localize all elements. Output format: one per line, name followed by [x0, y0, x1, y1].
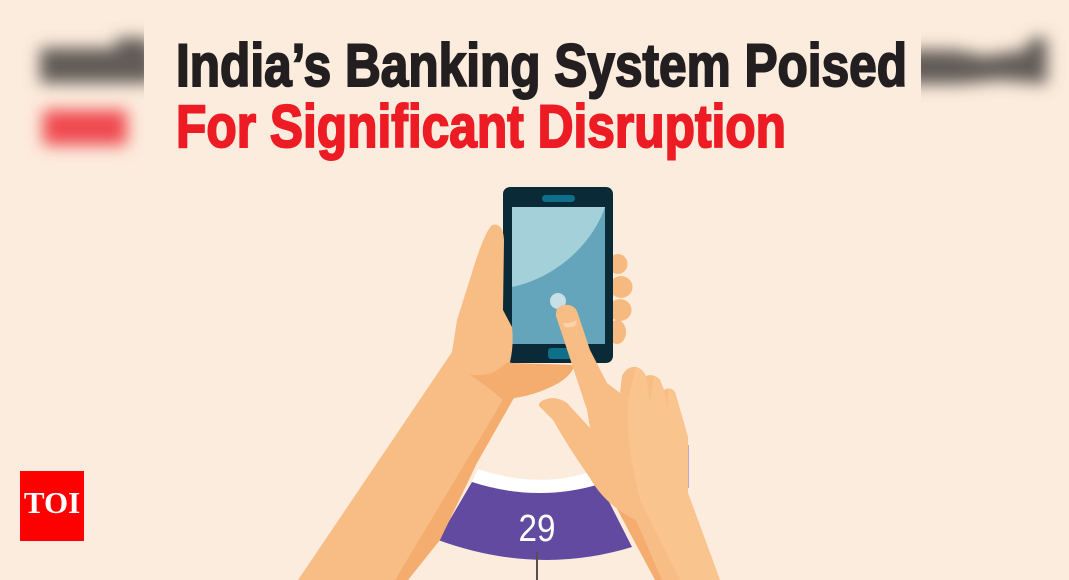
arm shadow strip — [390, 395, 515, 580]
logo: TOI — [20, 471, 84, 541]
dial sliver behind hand — [680, 445, 688, 488]
dial number: 29 — [518, 508, 556, 550]
phone speaker — [542, 195, 575, 202]
title line 2: For Significant Disruption — [176, 93, 786, 160]
phone screen highlight — [512, 207, 605, 287]
right hand — [539, 305, 720, 580]
icon: left hand and arm — [298, 225, 575, 580]
icon: fingers behind phone — [608, 254, 632, 344]
phone home button — [548, 348, 574, 359]
logo red square — [20, 471, 84, 541]
dial purple arc — [438, 482, 632, 560]
left arm and hand — [298, 225, 513, 580]
phone body — [503, 187, 613, 363]
icon: right hand and arm — [539, 305, 720, 580]
blurred title echo: right — [905, 38, 1047, 84]
icon: smartphone — [503, 187, 613, 363]
title — [176, 32, 907, 160]
blurred title echo: left — [40, 38, 155, 145]
logo text: TOI — [24, 485, 80, 520]
dial pointer line — [536, 552, 538, 580]
touch point — [550, 293, 566, 309]
fingernail — [563, 320, 577, 327]
phone screen — [512, 207, 605, 344]
dial white band — [470, 469, 600, 500]
title line 1: India’s Banking System Poised — [176, 32, 907, 99]
palm shadow — [470, 362, 575, 402]
forearm shadow — [615, 505, 675, 580]
purple dial — [438, 445, 688, 580]
back of hand highlight — [628, 367, 720, 580]
